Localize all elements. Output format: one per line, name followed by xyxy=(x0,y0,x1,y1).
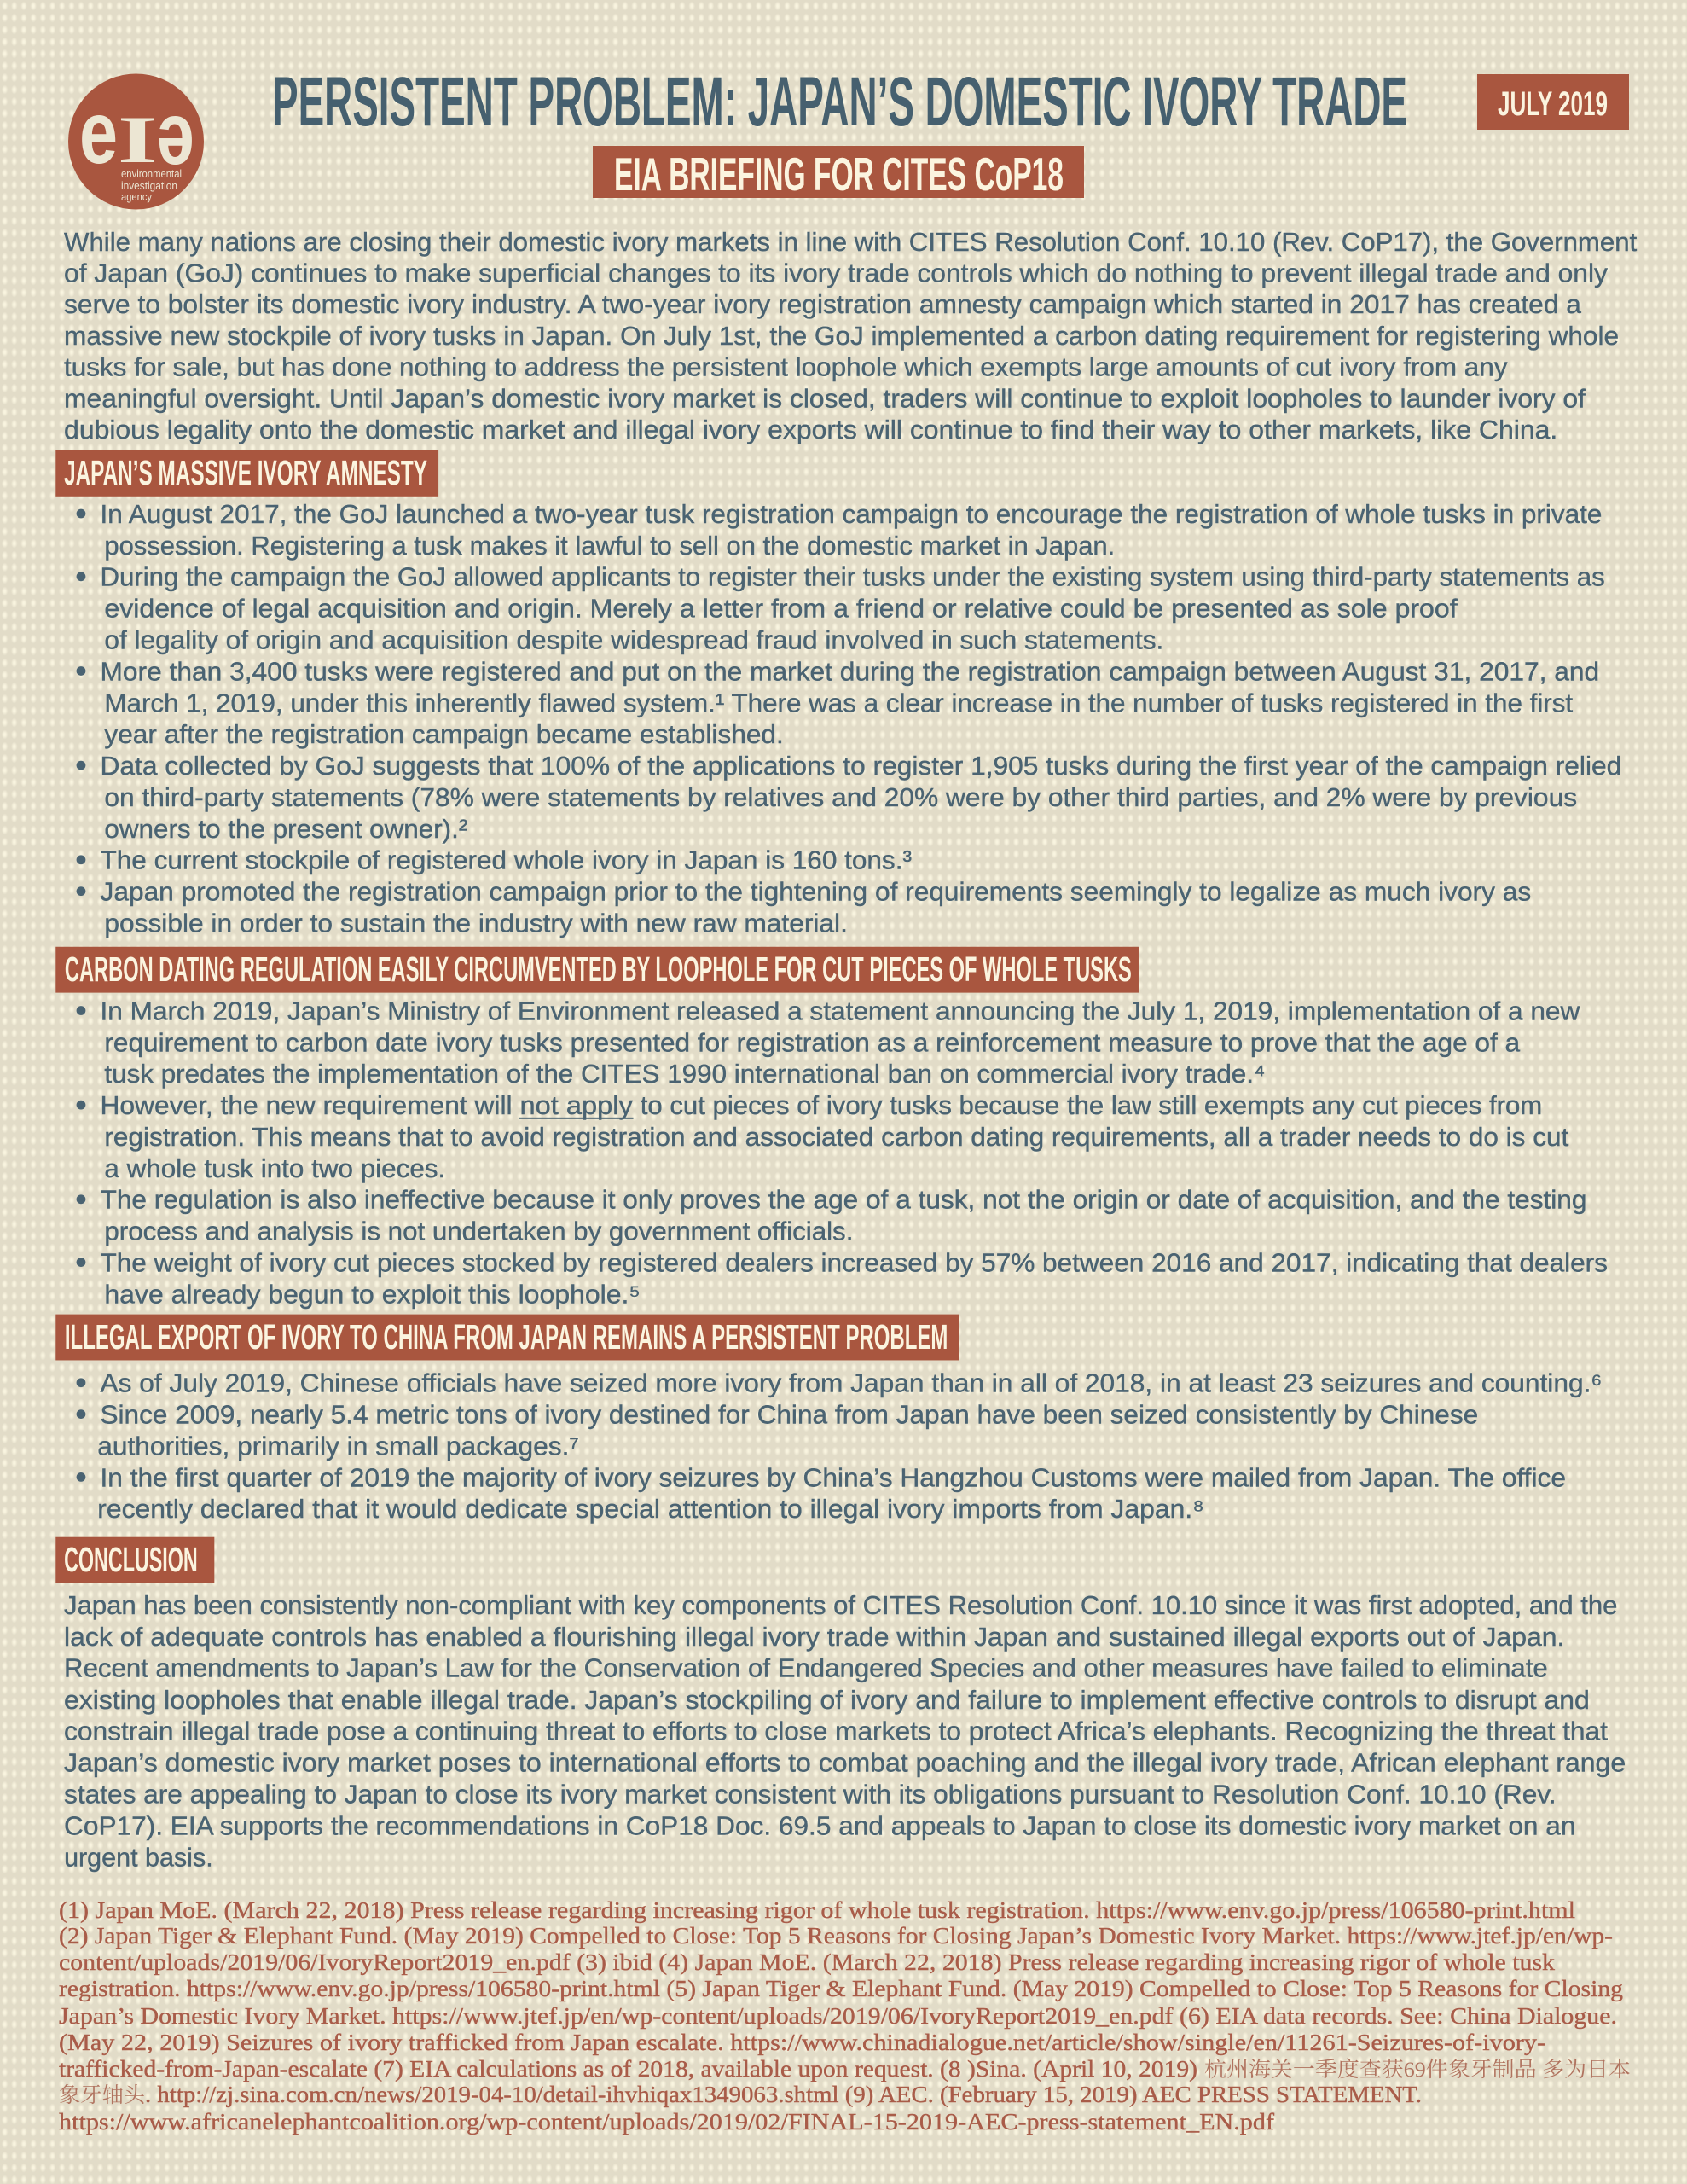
footnotes: https://www.africanelephantcoalition.org/wp-content/uploads/2019/02/FINAL-15-2019-AEC-press-statement_EN.pdf xyxy=(59,2109,1274,2135)
bullet: ineffective regulation: process and analysis is not undertaken by government officials. xyxy=(104,1217,853,1246)
subtitle banner: EIA BRIEFING FOR CITES CoP18 xyxy=(614,148,1064,200)
section heading: CONCLUSION xyxy=(64,1540,198,1579)
bullet: third-party statements: of legality of origin and acquisition despite widespread fraud involved in such statements. xyxy=(104,625,1163,655)
bullet: third-party statements xyxy=(77,562,1605,655)
bullet: not apply to cut pieces: a whole tusk into two pieces. xyxy=(104,1153,445,1183)
panel: carbon dating regulation xyxy=(55,947,1608,1309)
intro paragraph xyxy=(64,227,1638,444)
bullet: not apply to cut pieces: However, the new requirement will xyxy=(101,1090,513,1120)
conclusion text: urgent basis. xyxy=(64,1842,213,1872)
panel: Japan's massive ivory amnesty xyxy=(55,450,1621,938)
intro paragraph: serve to bolster its domestic ivory industry. A two-year ivory registration amnesty campaign which started in 2017 has created a xyxy=(64,289,1582,319)
conclusion text xyxy=(64,1590,1626,1872)
bullet: not apply to cut pieces xyxy=(77,1090,1569,1183)
bullet: not apply to cut pieces: not apply xyxy=(520,1090,633,1120)
bullet: Hangzhou Customs xyxy=(77,1462,1566,1524)
section heading xyxy=(55,450,438,497)
logo: EIA xyxy=(68,73,204,210)
footnotes: trafficked-from-Japan-escalate (7) EIA calculations as of 2018, available upon request. (8 )Sina. (April 10, 2019) xyxy=(59,2056,1197,2082)
footnotes: content/uploads/2019/06/IvoryReport2019_en.pdf (3) ibid (4) Japan MoE. (March 22, 2018) Press release regarding increasing rigor of whole tusk xyxy=(59,1949,1556,1975)
conclusion text: Japan has been consistently non-compliant with key components of CITES Resolution Conf. 10.10 since it was first adopted, and the xyxy=(64,1590,1617,1620)
bullet: 3,400 tusks: More than 3,400 tusks were registered and put on the market during the registration campaign between August 31, 2017, and xyxy=(101,656,1599,686)
section heading xyxy=(55,1537,214,1583)
bullet: 100% third-party data: Data collected by GoJ suggests that 100% of the applications to register 1,905 tusks during the first year of the campaign relied xyxy=(101,751,1621,781)
panel: illegal export to China xyxy=(55,1315,1602,1524)
bullet: two-year campaign: possession. Registering a tusk makes it lawful to sell on the domestic market in Japan. xyxy=(104,531,1115,561)
bullet: 3,400 tusks: year after the registration campaign became established. xyxy=(104,719,784,749)
bullet: 100% third-party data: owners to the present owner).² xyxy=(104,814,467,844)
bullet: 3,400 tusks: March 1, 2019, under this inherently flawed system.¹ There was a clear increase in the number of tusks registered in the first xyxy=(104,688,1574,717)
bullet: not apply to cut pieces: to cut pieces of ivory tusks because the law still exempts any cut pieces from xyxy=(641,1090,1542,1120)
section heading: JAPAN’S MASSIVE IVORY AMNESTY xyxy=(64,453,427,492)
bullet: two-year campaign xyxy=(77,499,1602,561)
logo: EIA: e xyxy=(157,97,194,196)
logo: EIA: agency xyxy=(121,190,152,203)
bullet: new requirement: In March 2019, Japan’s Ministry of Environment released a statement announcing the July 1, 2019, implementation of a new xyxy=(101,996,1580,1025)
bullet: 5.4 metric tons: authorities, primarily in small packages.⁷ xyxy=(97,1431,579,1461)
intro paragraph: While many nations are closing their domestic ivory markets in line with CITES Resolution Conf. 10.10 (Rev. CoP17), the Government xyxy=(64,227,1638,257)
bullet: 5.4 metric tons: Since 2009, nearly 5.4 metric tons of ivory destined for China from Japan have been seized consistently by Chinese xyxy=(101,1400,1478,1430)
conclusion text: existing loopholes that enable illegal trade. Japan’s stockpiling of ivory and failure to implement effective controls to disrupt and xyxy=(64,1685,1590,1715)
footnotes: registration. https://www.env.go.jp/press/106580-print.html (5) Japan Tiger & Elephant Fund. (May 2019) Compelled to Close: Top 5 Reasons for Closing xyxy=(59,1976,1623,2001)
section heading: ILLEGAL EXPORT OF IVORY TO CHINA FROM JAPAN REMAINS A PERSISTENT PROBLEM xyxy=(65,1317,948,1356)
logo: EIA: e xyxy=(79,84,118,183)
bullet: seizures in 2019: As of July 2019, Chinese officials have seized more ivory from Japan than in all of 2018, in at least 23 seizures and counting.⁶ xyxy=(101,1368,1602,1398)
bullet: new requirement: requirement to carbon date ivory tusks presented for registration as a reinforcement measure to prove that the age of a xyxy=(104,1027,1521,1057)
bullet: ineffective regulation xyxy=(77,1185,1586,1246)
panel: conclusion xyxy=(55,1537,1626,1872)
conclusion text: Recent amendments to Japan’s Law for the Conservation of Endangered Species and other measures have failed to eliminate xyxy=(64,1653,1548,1683)
footnotes: . http://zj.sina.com.cn/news/2019-04-10/detail-ihvhiqax1349063.shtml (9) AEC. (February 15, 2019) AEC PRESS STATEMENT. xyxy=(145,2082,1422,2107)
bullet: 100% third-party data: on third-party statements (78% were statements by relatives and 20% were by other third parties, and 2% were by previous xyxy=(104,782,1577,812)
conclusion text: states are appealing to Japan to close its ivory market consistent with its obligations pursuant to Resolution Conf. 10.10 (Rev. xyxy=(64,1779,1557,1809)
bullet: 100% third-party data xyxy=(77,751,1621,844)
footnotes xyxy=(59,1897,1631,2135)
bullet: 57% increase: The weight of ivory cut pieces stocked by registered dealers increased by 57% between 2016 and 2017, indicating that dealers xyxy=(101,1248,1608,1278)
footnotes: (1) Japan MoE. (March 22, 2018) Press release regarding increasing rigor of whole tusk registration. https://www.env.go.jp/press/106580-print.html xyxy=(59,1897,1575,1923)
bullet: two-year campaign: In August 2017, the GoJ launched a two-year tusk registration campaign to encourage the registration of whole tusks in private xyxy=(101,499,1602,529)
footnotes: (2) Japan Tiger & Elephant Fund. (May 2019) Compelled to Close: Top 5 Reasons for Closing Japan’s Domestic Ivory Market. https://www.jtef.jp/en/wp- xyxy=(59,1923,1613,1949)
bullet: third-party statements: During the campaign the GoJ allowed applicants to register their tusks under the existing system using third-party statements as xyxy=(101,562,1605,592)
footnotes: (May 22, 2019) Seizures of ivory trafficked from Japan escalate. https://www.chinadialogue.net/article/show/single/en/11261-Seizures-of-ivory- xyxy=(59,2030,1545,2055)
bullet: promotion of campaign: Japan promoted the registration campaign prior to the tightening of requirements seemingly to legalize as much ivory as xyxy=(101,877,1531,907)
conclusion text: CoP17). EIA supports the recommendations in CoP18 Doc. 69.5 and appeals to Japan to close its domestic ivory market on an xyxy=(64,1810,1575,1840)
bullet: promotion of campaign xyxy=(77,877,1531,938)
logo: EIA: environmental xyxy=(121,167,182,180)
intro paragraph: dubious legality onto the domestic market and illegal ivory exports will continue to find their way to other markets, like China. xyxy=(64,415,1557,444)
section heading xyxy=(55,947,1139,993)
conclusion text: lack of adequate controls has enabled a flourishing illegal ivory trade within Japan and sustained illegal exports out of Japan. xyxy=(64,1622,1564,1652)
bullet: Hangzhou Customs: In the first quarter of 2019 the majority of ivory seizures by China’s Hangzhou Customs were mailed from Japan. The office xyxy=(101,1462,1566,1492)
intro paragraph: of Japan (GoJ) continues to make superficial changes to its ivory trade controls which do nothing to prevent illegal trade and only xyxy=(64,258,1608,288)
bullet: promotion of campaign: possible in order to sustain the industry with new raw material. xyxy=(104,908,848,938)
section heading xyxy=(55,1315,959,1360)
bullet: Hangzhou Customs: recently declared that it would dedicate special attention to illegal ivory imports from Japan.⁸ xyxy=(97,1494,1204,1524)
bullet: 160 tons: The current stockpile of registered whole ivory in Japan is 160 tons.³ xyxy=(101,845,912,875)
bullet: 57% increase: have already begun to exploit this loophole.⁵ xyxy=(104,1279,641,1309)
intro paragraph: massive new stockpile of ivory tusks in Japan. On July 1st, the GoJ implemented a carbon dating requirement for registering whole xyxy=(64,321,1619,351)
footnotes: Japan’s Domestic Ivory Market. https://www.jtef.jp/en/wp-content/uploads/2019/06/IvoryReport2019_en.pdf (6) EIA data records. See: China Dialogue. xyxy=(59,2003,1617,2029)
conclusion text: Japan’s domestic ivory market poses to international efforts to combat poaching and the illegal ivory trade, African elephant range xyxy=(64,1748,1626,1778)
logo: EIA: investigation xyxy=(121,179,177,192)
bullet: 3,400 tusks xyxy=(77,656,1599,749)
bullet: new requirement xyxy=(77,996,1580,1089)
conclusion text: constrain illegal trade pose a continuing threat to efforts to close markets to protect Africa’s elephants. Recognizing the threat that xyxy=(64,1716,1608,1746)
intro paragraph: tusks for sale, but has done nothing to address the persistent loophole which exempts large amounts of cut ivory from any xyxy=(64,352,1508,382)
bullet: new requirement: tusk predates the implementation of the CITES 1990 international ban on commercial ivory trade.⁴ xyxy=(104,1059,1265,1089)
footnotes: 杭州海关一季度查获69件象牙制品 多为日本 xyxy=(1204,2058,1631,2082)
bullet: 5.4 metric tons xyxy=(77,1400,1478,1461)
date badge xyxy=(1477,74,1629,130)
date badge: JULY 2019 xyxy=(1498,85,1608,123)
bullet: 57% increase xyxy=(77,1248,1608,1309)
footnotes: 象牙轴头 xyxy=(59,2083,146,2107)
bullet: ineffective regulation: The regulation is also ineffective because it only proves the age of a tusk, not the origin or date of acquisition, and the testing xyxy=(101,1185,1586,1215)
logo: EIA: I xyxy=(118,102,157,177)
bullet: not apply to cut pieces: registration. This means that to avoid registration and associated carbon dating requirements, all a trader needs to do is cut xyxy=(104,1122,1569,1152)
intro paragraph: meaningful oversight. Until Japan’s domestic ivory market is closed, traders will continue to exploit loopholes to launder ivory of xyxy=(64,383,1586,413)
bullet: third-party statements: evidence of legal acquisition and origin. Merely a letter from a friend or relative could be presented as sole proof xyxy=(104,594,1458,624)
subtitle banner xyxy=(593,146,1084,200)
